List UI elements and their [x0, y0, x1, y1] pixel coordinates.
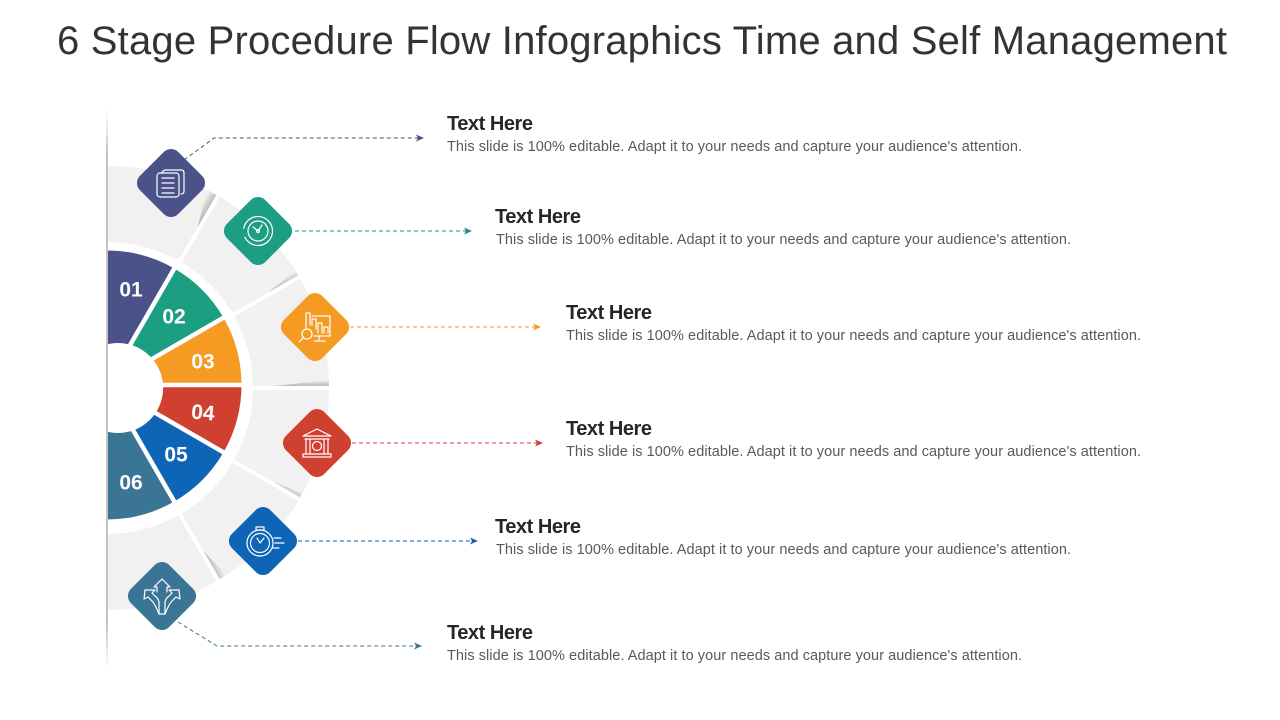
vertical axis line	[106, 108, 108, 670]
text block 5	[495, 516, 1071, 558]
text block 2: This slide is 100% editable. Adapt it to your needs and capture your audience's attention.	[496, 232, 1071, 248]
segment 04	[107, 385, 242, 452]
segment 02	[107, 268, 224, 385]
segment 05	[107, 385, 224, 502]
text block 5: Text Here	[495, 516, 581, 538]
text block 3: This slide is 100% editable. Adapt it to your needs and capture your audience's attention.	[566, 328, 1141, 344]
icon 5: stopwatch on blue diamond	[225, 503, 301, 579]
text block 6	[447, 622, 1022, 664]
text block 5: This slide is 100% editable. Adapt it to your needs and capture your audience's attention.	[496, 542, 1071, 558]
segment 03	[107, 318, 242, 385]
icon 6: diverging arrows on steel-blue diamond	[124, 558, 200, 634]
text block 1: Text Here	[447, 113, 533, 135]
text block 3	[566, 302, 1141, 344]
text block 4: Text Here	[566, 418, 652, 440]
leader 1	[184, 134, 424, 160]
leader 4	[352, 440, 543, 446]
numbered half wheel: 06	[119, 472, 143, 494]
text block 2: Text Here	[495, 206, 581, 228]
text block 6: This slide is 100% editable. Adapt it to your needs and capture your audience's attention.	[447, 648, 1022, 664]
text block 4: This slide is 100% editable. Adapt it to your needs and capture your audience's attention.	[566, 444, 1141, 460]
icon 4: bank on red diamond	[279, 405, 355, 481]
text block 2	[495, 206, 1071, 248]
numbered half wheel	[107, 250, 250, 520]
segment 06	[107, 385, 174, 520]
title: 6 Stage Procedure Flow Infographics Time and Self Management	[57, 19, 1227, 63]
numbered half wheel: 02	[162, 306, 186, 328]
text block 4	[566, 418, 1141, 460]
leader 5	[298, 538, 478, 544]
outer grey ring with six sections	[107, 189, 335, 587]
text block 6: Text Here	[447, 622, 533, 644]
leader 2	[295, 228, 472, 234]
numbered half wheel: 04	[190, 401, 216, 425]
leader 3	[350, 324, 541, 330]
numbered half wheel: 03	[191, 350, 215, 374]
numbered half wheel: 05	[164, 444, 188, 466]
text block 3: Text Here	[566, 302, 652, 324]
numbered half wheel: 01	[119, 278, 143, 302]
text block 1: This slide is 100% editable. Adapt it to your needs and capture your audience's attention.	[447, 139, 1022, 155]
icon 1: documents on navy diamond	[133, 145, 209, 221]
segment 01	[107, 250, 174, 385]
icon 3: chart and magnifier on orange diamond	[277, 289, 353, 365]
leader 6	[178, 622, 422, 650]
icon 2: clock on green diamond	[220, 193, 296, 269]
text block 1	[447, 113, 1022, 155]
